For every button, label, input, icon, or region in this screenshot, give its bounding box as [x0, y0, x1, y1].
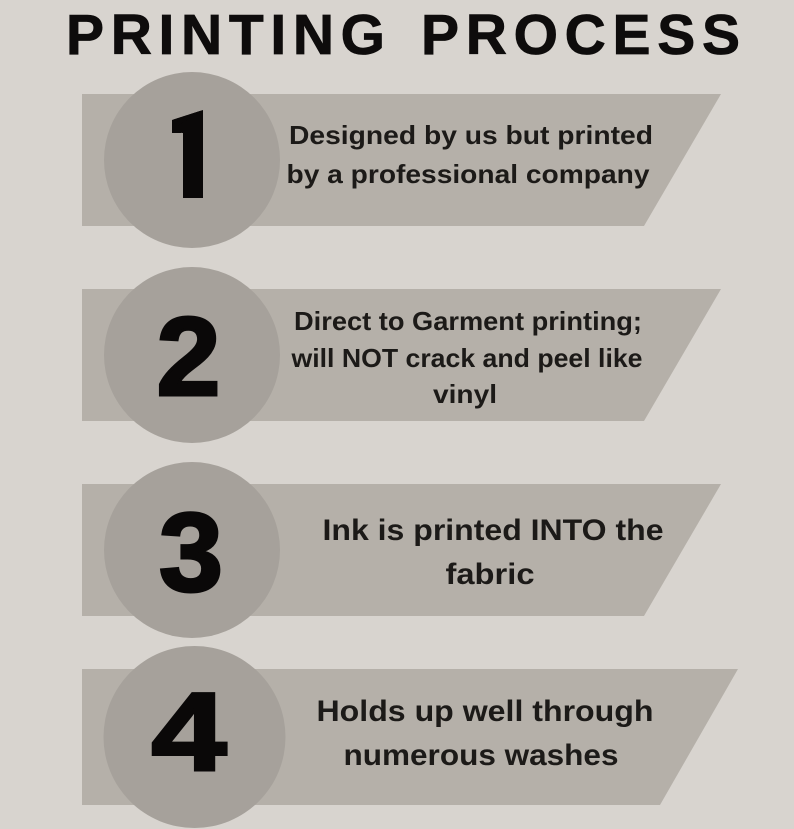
step 2 text: Direct to Garment printing;	[294, 306, 642, 336]
step 1	[82, 72, 721, 248]
step 3 circle	[104, 462, 280, 638]
step 4 number: 4	[152, 670, 227, 794]
step 1 text	[286, 120, 653, 189]
title	[66, 3, 740, 67]
step 2 text: will NOT crack and peel like	[290, 343, 642, 373]
step 3 text	[322, 514, 664, 591]
step 4 circle	[104, 646, 286, 828]
step 3	[82, 462, 721, 638]
step 1 circle	[104, 72, 280, 248]
step 3 text: fabric	[446, 558, 534, 591]
step 1 text: by a professional company	[286, 159, 650, 189]
step 4 text	[316, 695, 654, 772]
step 2 text	[290, 306, 642, 409]
step 2 text: vinyl	[433, 379, 497, 409]
step 1 number: 1	[157, 85, 226, 224]
step 4 text: Holds up well through	[316, 695, 654, 728]
step 4	[82, 646, 738, 828]
step 2	[82, 267, 721, 443]
step 1 text: Designed by us but printed	[289, 120, 653, 150]
step 3 number: 3	[159, 491, 223, 615]
step 2 number: 2	[156, 295, 220, 419]
title: PROCESS	[421, 3, 740, 67]
step 3 text: Ink is printed INTO the	[322, 514, 664, 547]
title: PRINTING	[66, 3, 385, 67]
step 1 banner	[82, 94, 721, 226]
step 4 banner	[82, 669, 738, 805]
step 3 banner	[82, 484, 721, 616]
step 4 text: numerous washes	[344, 739, 618, 772]
step 2 circle	[104, 267, 280, 443]
step 2 banner	[82, 289, 721, 421]
